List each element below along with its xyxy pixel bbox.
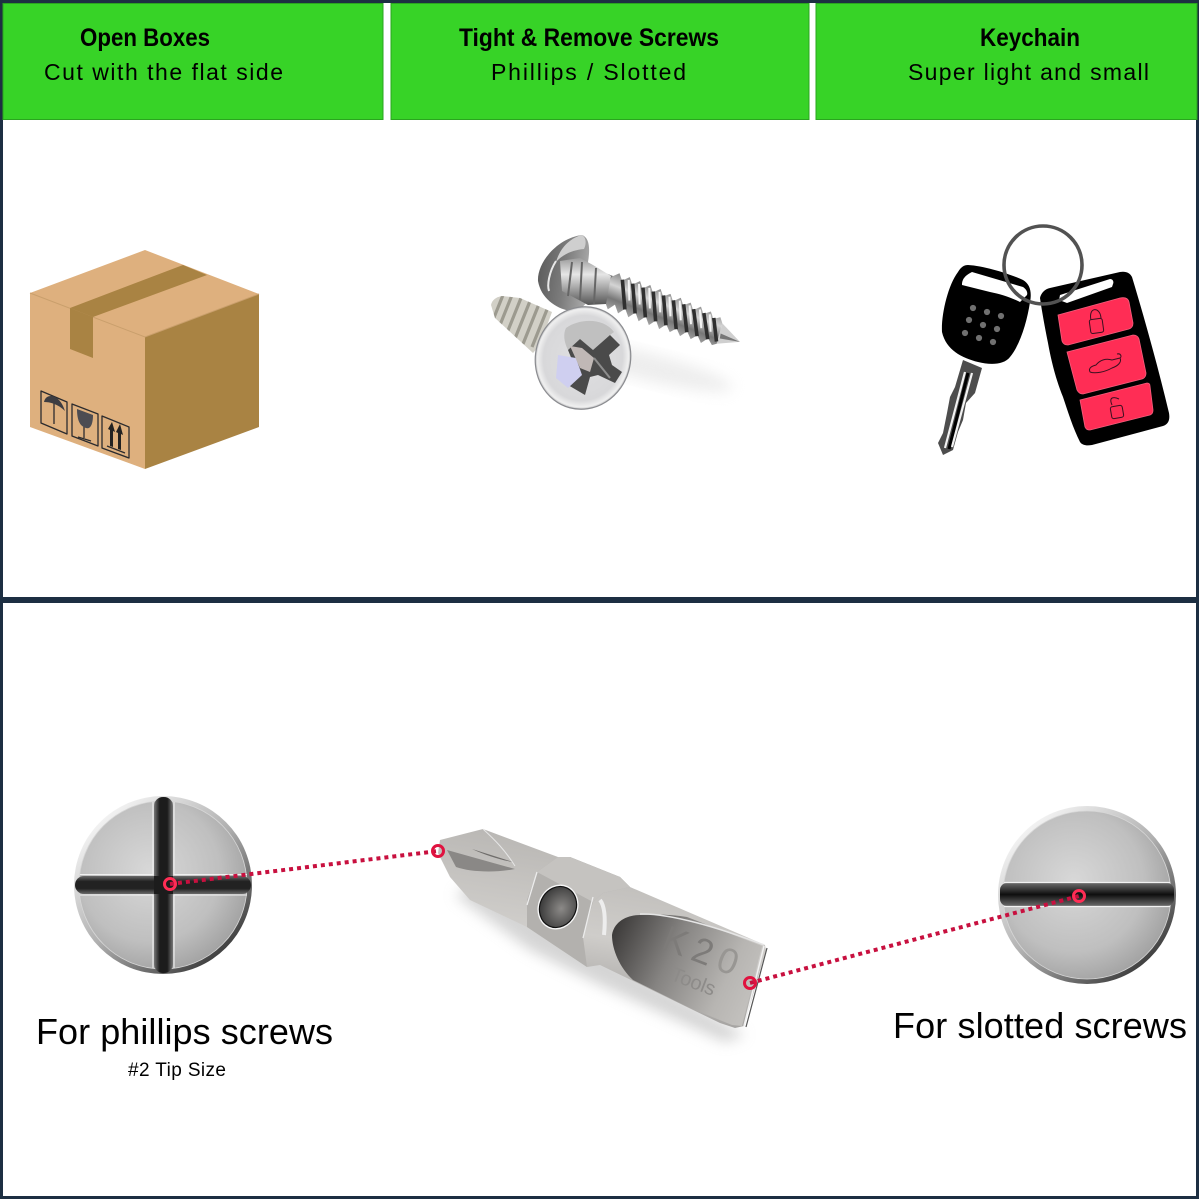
rear screw thread (585, 265, 747, 358)
icon: car keys (938, 226, 1169, 455)
header: keychain (816, 4, 1197, 120)
front screw shaft (491, 296, 552, 353)
caption: phillips: #2 Tip Size (128, 1060, 226, 1081)
rear screw neck (560, 258, 611, 305)
header: tight and remove screws: Phillips / Slotted (491, 59, 686, 85)
engraved logo: Tools (668, 964, 719, 1001)
marker: phillips screw (164, 878, 176, 890)
dotted leader: phillips (170, 851, 438, 884)
key ring (1004, 226, 1082, 304)
hex collar (527, 857, 630, 967)
phillips screw head (74, 796, 252, 974)
caption: phillips (36, 1011, 333, 1081)
remote body (1040, 272, 1169, 445)
header: tight and remove screws: Tight & Remove Screws (459, 24, 719, 52)
phillips tip flutes (447, 850, 515, 871)
panel: bottom bit detail (2, 602, 1198, 1198)
key dots (962, 305, 1004, 345)
rear screw head (538, 235, 589, 311)
header: tight and remove screws (391, 4, 809, 120)
front screw face shading (564, 321, 614, 350)
hex edge highlight (527, 872, 593, 938)
header: keychain: Keychain (980, 24, 1080, 52)
header: open boxes: Cut with the flat side (44, 59, 283, 85)
engraved logo: K20 (657, 917, 745, 983)
engraved logo (649, 917, 745, 1005)
remote button glyphs (1089, 310, 1124, 419)
slotted screw head (998, 806, 1176, 984)
front screw phillips recess (556, 335, 622, 395)
marker: slotted screw (1074, 890, 1084, 902)
dotted leader: slotted (750, 896, 1079, 983)
drill bit (438, 829, 767, 1042)
key fob opening (962, 272, 1027, 302)
through hole (530, 878, 586, 936)
header: open boxes (3, 4, 383, 120)
marker: bit tip (432, 846, 444, 856)
caption: phillips: For phillips screws (36, 1011, 333, 1052)
marker: bit blade (744, 978, 756, 988)
flat scoop (612, 915, 762, 1026)
panel: top uses (2, 2, 1198, 598)
header: keychain: Super light and small (908, 59, 1149, 85)
header: open boxes: Open Boxes (80, 24, 210, 52)
caption: slotted: For slotted screws (893, 1005, 1187, 1046)
key fob head (942, 265, 1031, 364)
remote buttons (1058, 298, 1153, 430)
hex top facet (537, 857, 630, 902)
icon: screws (491, 235, 740, 410)
icon: cardboard box (30, 250, 259, 469)
front screw head (524, 296, 642, 420)
shaft highlight (600, 900, 605, 935)
key blade (938, 360, 982, 455)
remote opening (1059, 279, 1113, 303)
